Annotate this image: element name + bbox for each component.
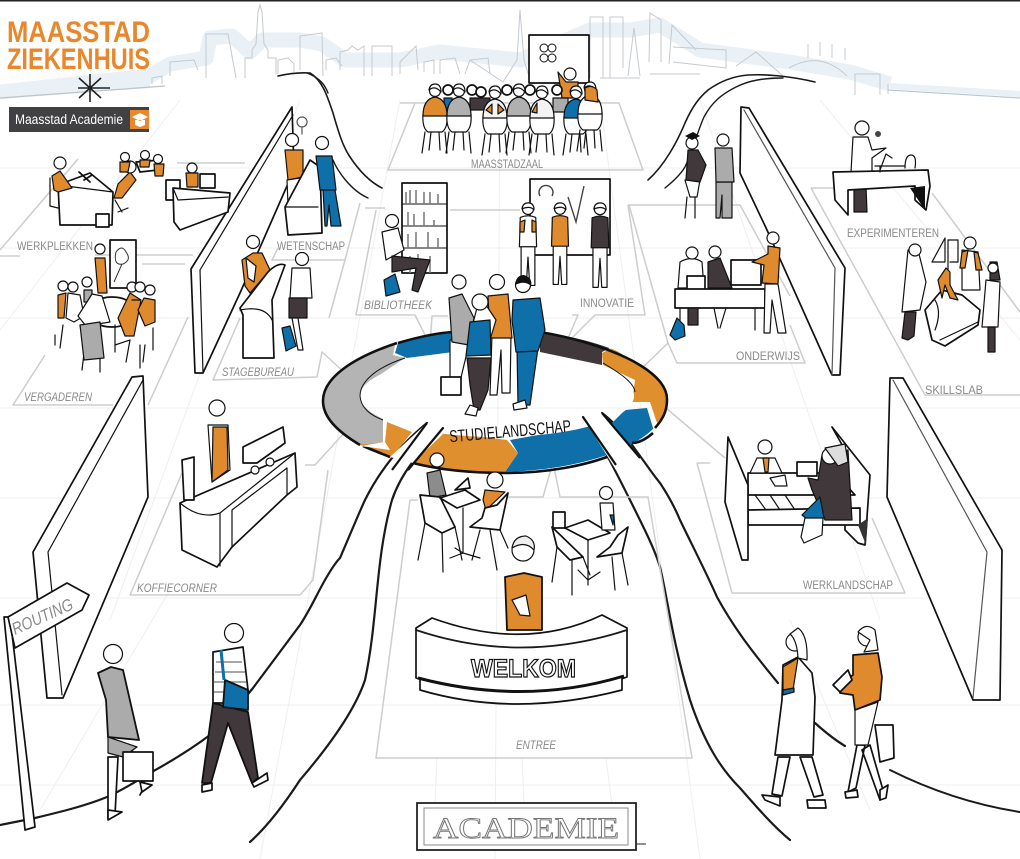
badge: maasstad academie: Maasstad Academie xyxy=(15,112,123,127)
person: orange shirt xyxy=(488,274,512,395)
panel: wetenschap zone xyxy=(272,203,385,318)
zone labels: MAASSTADZAAL xyxy=(471,159,543,171)
person: receptionist xyxy=(505,536,542,630)
ring segment: blue top left xyxy=(395,333,452,358)
ring segment: orange right xyxy=(602,348,666,423)
person: presenter xyxy=(558,68,578,98)
panel: werklandschap zone xyxy=(660,403,905,593)
scene: vergaderen xyxy=(55,240,155,372)
zone labels: BIBLIOTHEEK xyxy=(364,300,433,312)
person: man with blue bag xyxy=(202,624,268,792)
zone labels: KOFFIECORNER xyxy=(137,583,217,595)
scene: cafe tables xyxy=(418,453,628,595)
panel: experimenteren zone xyxy=(811,188,1020,395)
zone labels: VERGADEREN xyxy=(24,392,93,404)
person: grey suit xyxy=(441,275,474,395)
zone labels xyxy=(17,159,983,752)
logo: maasstad ziekenhuis xyxy=(7,16,150,102)
logo: maasstad ziekenhuis: MAASSTAD xyxy=(7,16,150,49)
ring segment: grey xyxy=(324,345,404,444)
person: seated reader xyxy=(382,214,430,296)
panel: werkplekken zone xyxy=(0,159,245,264)
person: blue scrubs xyxy=(512,275,545,410)
zone labels: EXPERIMENTEREN xyxy=(847,228,939,240)
ring segment: orange bottom xyxy=(416,434,518,472)
sign: routing: ROUTING xyxy=(9,595,76,639)
logo: maasstad ziekenhuis: ZIEKENHUIS xyxy=(7,43,150,76)
scene: welkom desk xyxy=(416,536,627,704)
zone labels: WETENSCHAP xyxy=(277,241,345,253)
zone labels: ENTREE xyxy=(516,740,556,752)
ring: studielandschap xyxy=(322,331,668,474)
scene: onderwijs xyxy=(670,232,786,340)
panel: vergaderen zone xyxy=(13,317,188,405)
scene: central group xyxy=(441,274,545,416)
person: woman with backpack xyxy=(465,294,496,416)
scene: wetenschap xyxy=(285,117,341,235)
wall: bottom right xyxy=(887,378,1002,700)
zone labels: WERKPLEKKEN xyxy=(17,241,93,253)
sign: academie: ACADEMIE xyxy=(433,812,619,845)
panel: stagebureau zone xyxy=(213,318,345,380)
wall: top right xyxy=(740,107,845,375)
person: man in grey suit xyxy=(715,134,734,218)
person: woman in orange back xyxy=(483,472,505,510)
scene: maasstadzaal xyxy=(422,35,602,155)
scene: experimenteren xyxy=(833,121,930,215)
person: woman in white dress xyxy=(762,628,826,808)
panel: bibliotheek zone xyxy=(356,210,520,345)
wall: bottom left xyxy=(33,376,148,698)
person: graduate xyxy=(685,132,706,218)
person: woman in orange blouse xyxy=(833,626,894,800)
label: welkom: WELKOM xyxy=(471,655,576,683)
panel: maasstadzaal zone xyxy=(388,103,643,170)
sign: routing xyxy=(4,583,89,830)
scene: werklandschap xyxy=(725,427,870,560)
ring segment: blue right xyxy=(612,408,654,445)
panel: onderwijs zone xyxy=(629,187,811,370)
sign: academie xyxy=(417,803,646,850)
scene: afstuderen xyxy=(685,132,734,218)
ring segment: blue bottom xyxy=(505,426,607,472)
ring segment: small orange left xyxy=(360,422,412,458)
zone labels: WERKLANDSCHAP xyxy=(803,580,893,592)
zone labels: SKILLSLAB xyxy=(925,385,983,397)
scene: werkplekken xyxy=(50,150,230,230)
panel: entree zone xyxy=(376,462,692,758)
label: studielandschap: STUDIELANDSCHAP xyxy=(449,417,572,446)
scene: innovatie xyxy=(519,179,610,287)
icon: star xyxy=(78,74,110,102)
panel: koffiecorner zone xyxy=(130,432,345,595)
scene: skillslab xyxy=(902,237,1000,352)
zone labels: ONDERWIJS xyxy=(736,351,800,363)
wall: top left xyxy=(191,107,294,373)
panel: innovatie zone xyxy=(565,205,790,345)
skyline xyxy=(0,5,1020,98)
icon: presentation screen xyxy=(529,35,589,83)
person: man with orange scarf xyxy=(750,440,782,473)
zone labels: STAGEBUREAU xyxy=(222,367,295,379)
person: woman with laptop xyxy=(427,453,446,498)
scene: bibliotheek xyxy=(382,183,447,296)
person: woman in grey coat xyxy=(98,644,153,820)
back row of heads xyxy=(443,85,562,97)
scene: stagebureau xyxy=(240,236,312,358)
zone labels: INNOVATIE xyxy=(580,298,634,310)
badge: maasstad academie xyxy=(9,107,149,132)
person: woman in dark top xyxy=(801,444,852,543)
ring segment: dark xyxy=(540,334,610,365)
scene: koffiecorner xyxy=(180,400,297,567)
